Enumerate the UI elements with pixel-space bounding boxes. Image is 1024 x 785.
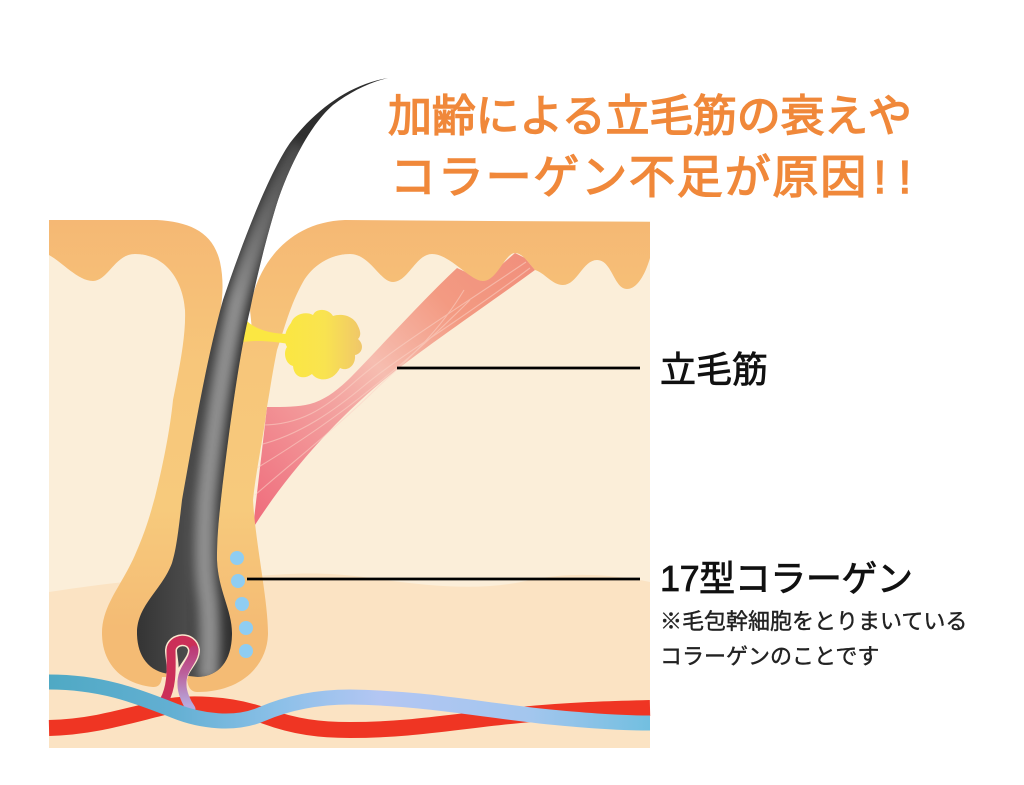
label: muscle: 立毛筋: [660, 349, 768, 390]
leader line: collagen: [247, 578, 640, 580]
title: コラーゲン不足が原因: [390, 151, 868, 203]
artery: [49, 704, 650, 730]
title: [388, 92, 913, 203]
title: !: [874, 151, 888, 203]
dermis background: [49, 221, 650, 748]
epidermis and hair follicle: [49, 220, 650, 692]
note: ※毛包幹細胞をとりまいている: [660, 609, 967, 634]
title: !: [898, 151, 913, 203]
vein: [49, 682, 650, 723]
title: 加齢による立毛筋の衰えや: [388, 92, 912, 141]
sebaceous gland: [285, 310, 362, 379]
sebaceous gland duct: [243, 321, 290, 344]
arrector pili muscle: [253, 253, 535, 528]
note: [660, 609, 967, 669]
lower dermis layer: [49, 574, 650, 748]
skin diagram: [49, 70, 650, 748]
label: collagen: 17型コラーゲン: [660, 558, 913, 599]
white notch above the follicle opening: [150, 219, 350, 340]
hair papilla: [164, 640, 194, 709]
note: コラーゲンのことです: [660, 644, 879, 669]
collagen dots: [230, 551, 253, 658]
leader line: muscle: [397, 367, 640, 369]
hair shaft and bulb: [130, 70, 400, 685]
